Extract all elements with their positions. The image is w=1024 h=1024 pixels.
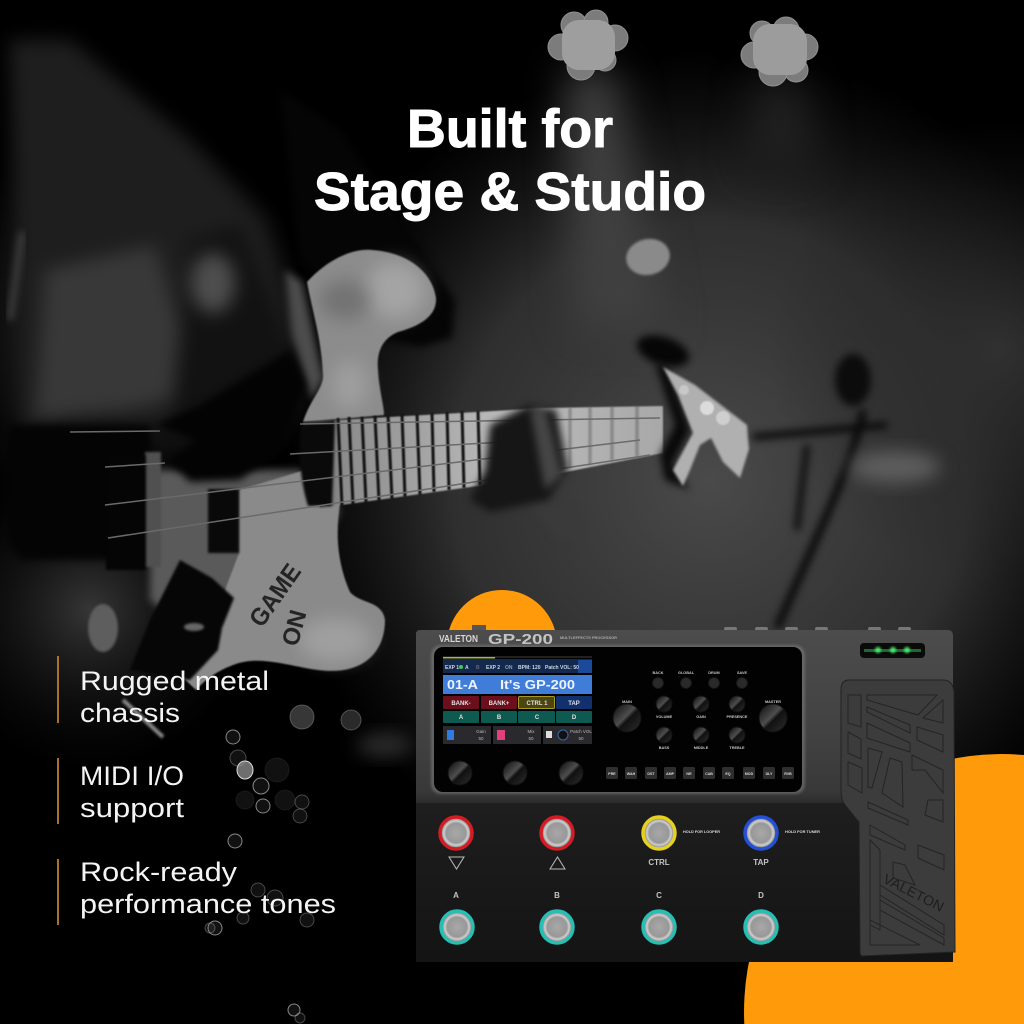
switch labels: B xyxy=(554,891,560,900)
feature: rugged metal chassis: chassis xyxy=(80,698,180,728)
knob and button labels: MAIN xyxy=(622,700,632,704)
expression pedal: VALETON xyxy=(881,870,947,915)
effect block buttons: AMP xyxy=(666,772,675,776)
touch screen: BANK+ xyxy=(489,701,510,707)
feature: rock-ready tones xyxy=(57,857,336,925)
bokeh lights xyxy=(205,705,361,1023)
mic stand xyxy=(753,354,887,628)
knob and button labels: BACK xyxy=(653,671,664,675)
sticker GAME ON: ON xyxy=(277,607,312,649)
switch labels: CTRL xyxy=(648,858,670,867)
effect block buttons: MOD xyxy=(745,772,754,776)
guitar body xyxy=(150,250,436,690)
blurred spot on stage floor xyxy=(850,451,940,483)
footswitches: HOLD FOR TUNER xyxy=(785,829,820,834)
effect block buttons: DST xyxy=(647,772,655,776)
touch screen: It's GP-200 xyxy=(500,677,575,692)
touch screen: 50 xyxy=(528,736,534,741)
knob and button labels: BASS xyxy=(659,746,670,750)
strap shadow behind horn xyxy=(280,90,455,347)
effect block buttons: NR xyxy=(686,772,692,776)
touch screen: ON xyxy=(505,665,513,671)
brand logo: VALETON xyxy=(439,634,478,645)
knob and button labels: SAVE xyxy=(737,671,747,675)
stage lights xyxy=(548,10,818,86)
encoder knobs xyxy=(448,696,787,785)
feature list xyxy=(57,656,336,925)
headstock xyxy=(633,329,749,490)
touch screen: B xyxy=(497,715,502,721)
touch screen: BANK- xyxy=(451,701,471,707)
effect block buttons xyxy=(606,767,794,779)
title xyxy=(314,99,706,222)
arm and hand xyxy=(10,40,323,470)
top jacks xyxy=(472,625,911,631)
brand logo: MULTI-EFFECTS PROCESSOR xyxy=(560,635,617,640)
feature: rock-ready tones: performance tones xyxy=(80,889,336,919)
touch screen: Patch VOL: 50 xyxy=(545,665,579,671)
effect block buttons: RVB xyxy=(784,772,792,776)
touch screen: BPM: 120 xyxy=(518,665,541,671)
multi-effects pedal xyxy=(416,625,955,962)
orange circle behind pedal, top xyxy=(447,590,557,700)
feature: MIDI I/O support: support xyxy=(80,793,185,823)
feature: rock-ready tones: Rock-ready xyxy=(80,857,238,887)
fingers xyxy=(155,350,305,482)
touch screen: C xyxy=(535,715,540,721)
strings xyxy=(70,418,660,538)
knob and button labels: TREBLE xyxy=(729,746,745,750)
effect block buttons: CAB xyxy=(705,772,713,776)
touch screen: EXP 1 xyxy=(445,665,459,671)
LED strip xyxy=(860,643,925,658)
sticker GAME ON: GAME xyxy=(244,559,307,632)
switch labels: C xyxy=(656,891,662,900)
knob and button labels xyxy=(622,671,781,750)
switch labels: A xyxy=(453,891,459,900)
knob and button labels: DRUM xyxy=(708,671,720,675)
expression pedal xyxy=(841,680,955,956)
touch screen: EXP 2 xyxy=(486,665,500,671)
blurred light spot xyxy=(623,235,673,279)
title: Built for xyxy=(407,99,613,159)
brand logo: GP-200 xyxy=(488,631,553,648)
feature: rugged metal chassis xyxy=(57,656,269,728)
touch screen: A xyxy=(465,665,469,671)
left dark body and bridge xyxy=(8,425,160,560)
switch labels: D xyxy=(758,891,764,900)
knob and button labels: MASTER xyxy=(765,700,781,704)
round buttons xyxy=(652,678,748,688)
touch screen: 01-A xyxy=(447,677,479,692)
footswitches: HOLD FOR LOOPER xyxy=(683,829,720,834)
bank up icon xyxy=(550,857,565,869)
fretboard xyxy=(300,405,663,508)
knob and button labels: PRESENCE xyxy=(727,715,748,719)
touch screen: B xyxy=(476,665,480,671)
touch screen: D xyxy=(572,715,577,721)
light beams xyxy=(565,70,815,330)
feature: MIDI I/O support xyxy=(57,758,185,824)
switch rings xyxy=(440,817,777,943)
knob and button labels: MIDDLE xyxy=(694,746,709,750)
effect block buttons: PRE xyxy=(608,772,616,776)
knob and button labels: GAIN xyxy=(696,715,706,719)
title: Stage & Studio xyxy=(314,162,706,222)
control panel xyxy=(431,645,805,794)
knob and button labels: VOLUME xyxy=(656,715,673,719)
feature: MIDI I/O support: MIDI I/O xyxy=(80,761,184,791)
switch labels: TAP xyxy=(753,858,769,867)
touch screen: Gain xyxy=(476,729,486,734)
orange circle bottom right xyxy=(744,754,1024,1024)
effect block buttons: EQ xyxy=(725,772,731,776)
feature: rugged metal chassis: Rugged metal xyxy=(80,666,269,696)
effect block buttons: DLY xyxy=(766,772,773,776)
knob and button labels: GLOBAL xyxy=(678,671,695,675)
brand logo xyxy=(439,631,617,648)
touch screen: Patch VOL xyxy=(570,729,592,734)
touch screen: A xyxy=(459,715,464,721)
chassis xyxy=(416,630,953,962)
plate highlight xyxy=(123,700,163,737)
touch screen: Mix xyxy=(528,729,535,734)
bank down icon xyxy=(449,857,464,869)
lower footswitch deck xyxy=(416,803,860,960)
footswitches xyxy=(440,817,820,943)
switch labels xyxy=(453,858,769,900)
touch screen: TAP xyxy=(568,701,580,707)
knob cluster and pickups xyxy=(88,452,239,680)
guitar lower body xyxy=(175,470,385,690)
touch screen: CTRL 1 xyxy=(527,701,548,707)
touch screen: 50 xyxy=(578,736,584,741)
touch screen: 50 xyxy=(478,736,484,741)
fretting hand xyxy=(470,404,583,543)
touch screen xyxy=(443,656,592,744)
guitar horn xyxy=(303,250,436,422)
effect block buttons: WAH xyxy=(627,772,636,776)
